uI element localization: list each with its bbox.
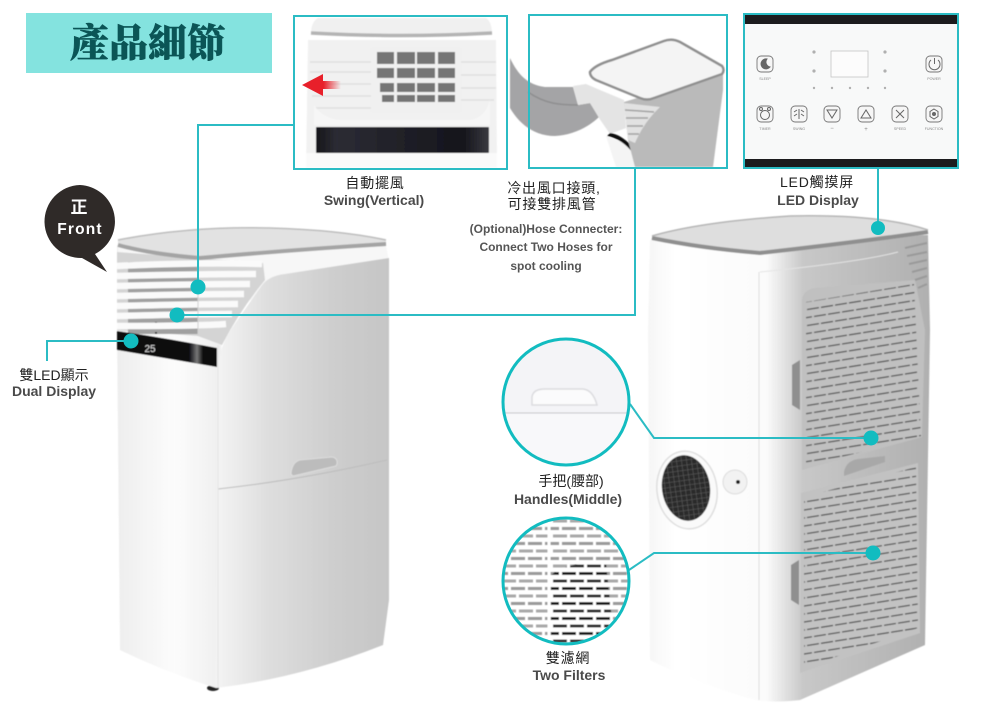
handle photo: [506, 388, 626, 414]
product: front view unit: [117, 228, 389, 691]
label: LED display: [777, 174, 859, 208]
label: filters: 雙濾網: [546, 650, 590, 666]
touch buttons: [757, 56, 942, 122]
product: rear view unit: [648, 216, 930, 702]
panel: swing detail: [294, 16, 507, 169]
button labels: POWER: [927, 77, 941, 81]
callout leader lines: [47, 125, 878, 570]
label: LED display: LED Display: [777, 192, 859, 208]
vent grille: [117, 252, 265, 345]
button labels: FUNCTION: [925, 127, 944, 131]
black strips: [745, 15, 957, 24]
unit body: [606, 136, 635, 167]
label: dual display: [12, 367, 96, 399]
hoses: [510, 58, 599, 136]
callout dots: [124, 221, 885, 560]
button labels: −: [830, 126, 834, 132]
magnifier: filter: [500, 515, 632, 647]
connectors: [573, 84, 626, 134]
seam and handle: [218, 460, 387, 489]
label: LED display: LED觸摸屏: [780, 174, 854, 190]
small drain port: [723, 470, 747, 494]
button glyphs: [760, 58, 940, 120]
red arrow: [302, 74, 341, 96]
label: dual display: Dual Display: [12, 383, 96, 399]
label: handles: 手把(腰部): [538, 473, 604, 489]
front badge: Front: [57, 221, 103, 238]
upper body band: [118, 245, 389, 300]
panel: LED touch screen: [744, 14, 958, 168]
upper perforated panel: [802, 280, 925, 470]
label: swing: Swing(Vertical): [324, 192, 424, 208]
label: swing: [324, 175, 424, 208]
title banner: [26, 13, 272, 73]
button labels: SPEED: [894, 127, 906, 131]
swing photo: [306, 18, 497, 168]
body: [648, 235, 930, 702]
hose photo: [510, 40, 724, 167]
rear exhaust port: [652, 447, 722, 533]
label: hose connector: spot cooling: [510, 259, 582, 273]
front face: [117, 245, 222, 688]
button labels: SWING: [793, 127, 805, 131]
label: hose connector: [470, 180, 622, 273]
label: handles: [514, 473, 622, 507]
button labels: TIMER: [759, 127, 771, 131]
label: filters: [533, 650, 606, 683]
title text: 產品細節: [70, 22, 226, 66]
magnifier: handle: [500, 339, 630, 470]
foot: [207, 685, 219, 691]
label: handles: Handles(Middle): [514, 491, 622, 507]
filter photo: [504, 520, 628, 642]
button labels: [759, 77, 944, 133]
front badge: [45, 185, 115, 272]
button labels: +: [864, 127, 868, 133]
label: hose connector: 冷出風口接頭,: [507, 180, 601, 196]
label: filters: Two Filters: [533, 667, 606, 683]
label: hose connector: 可接雙排風管: [508, 196, 596, 212]
lid: [652, 216, 928, 253]
display digits: 25: [144, 344, 156, 355]
panel: hose connector detail: [510, 15, 727, 168]
side recess handles: [792, 360, 800, 410]
screen window: [831, 51, 868, 77]
label: dual display: 雙LED顯示: [19, 367, 89, 383]
label: swing: 自動擺風: [345, 175, 405, 191]
lid: [118, 228, 386, 259]
label: hose connector: (Optional)Hose Connecter:: [470, 222, 622, 236]
button labels: SLEEP: [759, 77, 771, 81]
indicator dots: [812, 50, 887, 89]
lower perforated panel: [800, 463, 920, 673]
side vent lines: [905, 243, 927, 288]
badge text: 正: [70, 198, 88, 217]
display band: [117, 331, 217, 367]
label: hose connector: Connect Two Hoses for: [479, 240, 613, 254]
side face: [216, 258, 389, 688]
